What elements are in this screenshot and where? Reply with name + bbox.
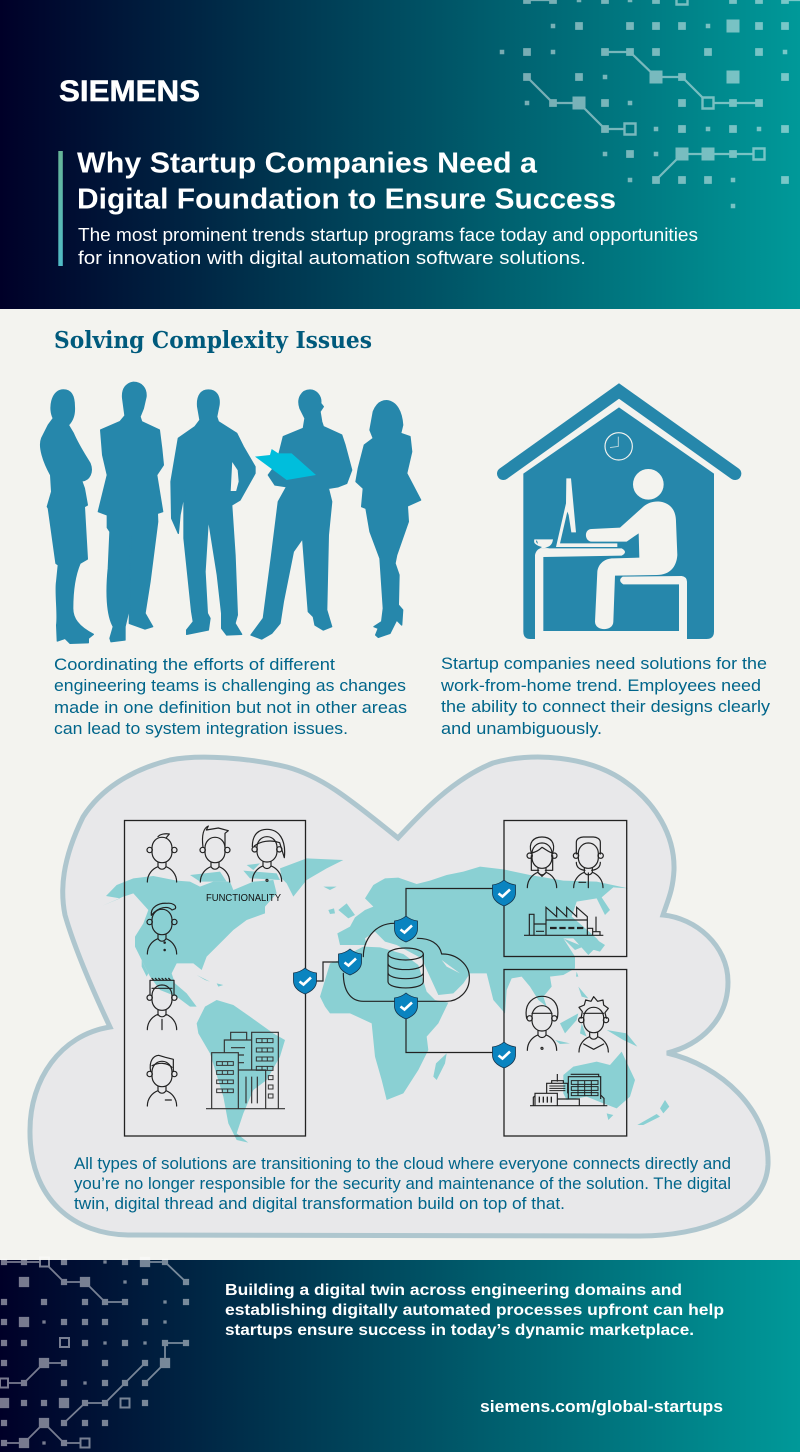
paragraph: work from home: and unambiguously. [441, 719, 602, 738]
closing statement [225, 1282, 724, 1339]
paragraph: engineering teams: made in one definition but not in other areas [54, 698, 407, 717]
paragraph: engineering teams: engineering teams is challenging as changes [54, 676, 406, 695]
paragraph: cloud transition: you’re no longer responsible for the security and maintenance of the solution. The digital [74, 1175, 731, 1193]
paragraph: cloud transition: All types of solutions are transitioning to the cloud where everyone connects directly and [74, 1155, 731, 1173]
cloud hub connectors [305, 888, 504, 1052]
paragraph: work from home: the ability to connect their designs clearly [441, 697, 771, 716]
world map [103, 858, 669, 1143]
roof [503, 391, 735, 474]
paragraph: cloud transition [74, 1155, 731, 1213]
top regional box [504, 820, 627, 956]
icon: factory [524, 907, 603, 935]
paragraph: work from home: work-from-home trend. Employees need [440, 676, 761, 695]
engineering functions box [124, 820, 306, 1136]
closing statement: Building a digital twin across engineering domains and [225, 1282, 682, 1299]
paragraph: engineering teams [54, 655, 407, 738]
paragraph: engineering teams: Coordinating the efforts of different [54, 655, 335, 674]
worker at desk [534, 469, 687, 639]
subtitle: The most prominent trends startup programs face today and opportunities [78, 224, 698, 245]
header circuit pattern [502, 0, 800, 206]
illustration: engineering team silhouettes [41, 382, 421, 643]
icon: wall clock [605, 433, 632, 460]
footer band [0, 1258, 800, 1452]
closing statement: startups ensure success in today’s dynamic marketplace. [225, 1322, 694, 1339]
paragraph: cloud transition: twin, digital thread and digital transformation build on top of that. [74, 1195, 565, 1213]
house body [523, 407, 714, 639]
subtitle: for innovation with digital automation software solutions. [78, 247, 586, 268]
people group [527, 837, 603, 888]
bottom regional box [504, 970, 627, 1136]
section heading: Solving Complexity Issues [54, 326, 372, 354]
people group [526, 996, 609, 1052]
title [77, 148, 616, 216]
closing statement: establishing digitally automated processes upfront can help [225, 1302, 724, 1319]
icon: central cloud and database [343, 923, 469, 1001]
paragraph: work from home: Startup companies need solutions for the [441, 654, 767, 673]
icon: office buildings [206, 1032, 285, 1109]
subtitle [78, 224, 698, 268]
people group [147, 826, 285, 1106]
icon: clipboard [255, 449, 316, 480]
icon: campus buildings [530, 1074, 607, 1106]
title: Digital Foundation to Ensure Success [77, 184, 616, 216]
illustration: working from home [503, 391, 735, 639]
panel: cloud shape [30, 757, 768, 1236]
paragraph: work from home [440, 654, 771, 738]
map: Americas [103, 858, 343, 1143]
footer circuit pattern [0, 1258, 186, 1448]
title accent bar [58, 151, 63, 266]
label: functionality: FUNCTIONALITY [206, 893, 281, 904]
icon: security shields [294, 880, 516, 1068]
paragraph: engineering teams: can lead to system integration issues. [54, 719, 348, 738]
map: Europe, Africa, Asia [320, 867, 628, 1100]
title: Why Startup Companies Need a [77, 148, 538, 180]
header band [0, 0, 800, 309]
website link: siemens.com/global-startups [480, 1397, 723, 1416]
logo: Siemens: SIEMENS [59, 75, 200, 108]
map: Asia Pacific and Oceania [555, 937, 669, 1125]
